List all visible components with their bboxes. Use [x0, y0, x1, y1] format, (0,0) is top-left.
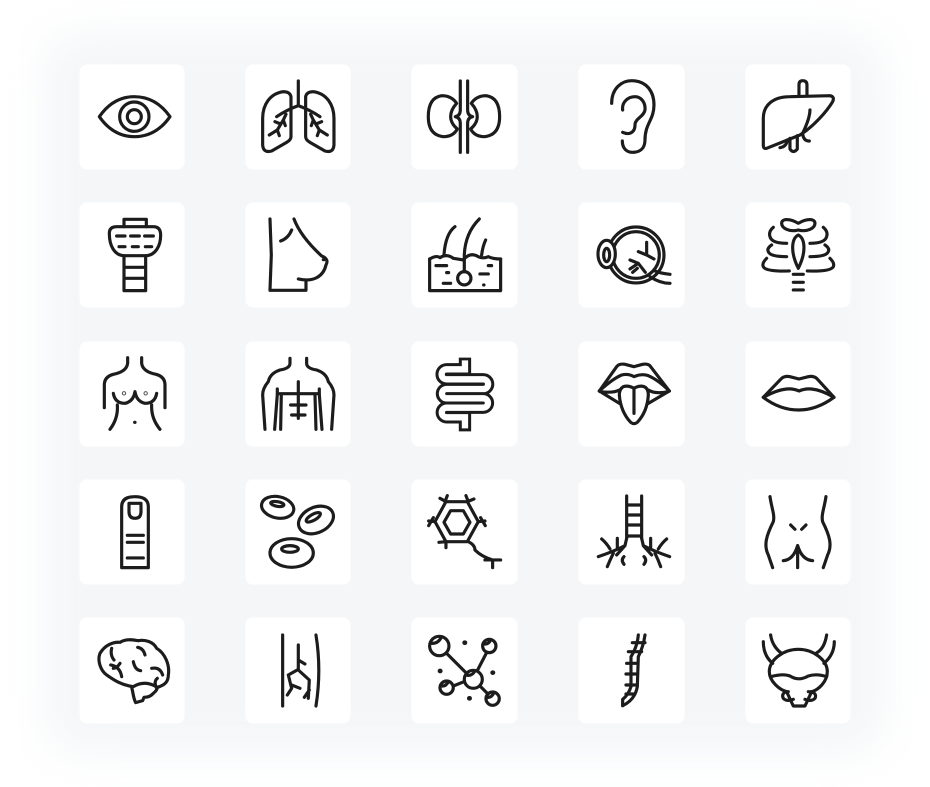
- panel: rib cage tile: [745, 202, 851, 308]
- panel: spinal ladder tile: [578, 617, 685, 724]
- icon: skin and hair: [430, 219, 501, 291]
- panel: kidneys tile: [411, 64, 518, 170]
- icon: rib cage: [763, 220, 834, 290]
- panel: eye tile: [79, 64, 185, 170]
- panel: female torso tile: [79, 341, 185, 447]
- icon: spinal column: [623, 635, 645, 706]
- panel: ear tile: [578, 64, 685, 170]
- panel: buttocks tile: [745, 479, 851, 585]
- icon: finger: [122, 497, 148, 568]
- icon: eye: [99, 97, 170, 137]
- icon: liver: [763, 81, 833, 151]
- panel: male torso tile: [245, 341, 351, 447]
- icon: brain: [99, 640, 169, 703]
- icon: eyeball anatomy: [598, 227, 670, 283]
- panel: skin tile: [411, 202, 518, 308]
- panel: blood cells tile: [245, 479, 351, 585]
- icon: neuron: [429, 496, 501, 568]
- icon: red blood cells: [259, 493, 338, 567]
- panel: eyeball tile: [578, 202, 685, 308]
- icon: trachea and bronchi: [598, 496, 670, 567]
- panel: bladder tile: [745, 617, 851, 724]
- icon: bladder: [763, 635, 834, 706]
- panel: tongue tile: [578, 341, 685, 447]
- panel: liver tile: [745, 64, 851, 170]
- panel: neuron tile: [411, 479, 518, 585]
- panel: brain tile: [79, 617, 185, 724]
- icon: kidneys: [428, 81, 500, 152]
- icon: lips: [763, 376, 834, 410]
- icon: mouth with tongue: [599, 364, 669, 424]
- panel: trachea tile: [578, 479, 685, 585]
- icon: vein branches: [283, 635, 319, 706]
- icon: lungs: [263, 81, 334, 152]
- icon: stomach lining: [109, 219, 161, 291]
- icon: breast side view: [270, 219, 327, 290]
- icon: male torso: [263, 358, 334, 429]
- panel: stomach lining tile: [79, 202, 185, 308]
- panel: intestine tile: [411, 341, 518, 447]
- icon: molecule: [430, 636, 499, 705]
- icon: intestine: [442, 358, 488, 431]
- icon: female torso: [104, 358, 165, 429]
- panel: breast tile: [245, 202, 351, 308]
- icon: lower back: [766, 497, 830, 568]
- panel: lungs tile: [245, 64, 351, 170]
- panel: lips tile: [745, 341, 851, 447]
- panel: molecule tile: [411, 617, 518, 724]
- icon: ear: [612, 81, 654, 152]
- panel: vein tile: [245, 617, 351, 724]
- panel: finger tile: [79, 479, 185, 585]
